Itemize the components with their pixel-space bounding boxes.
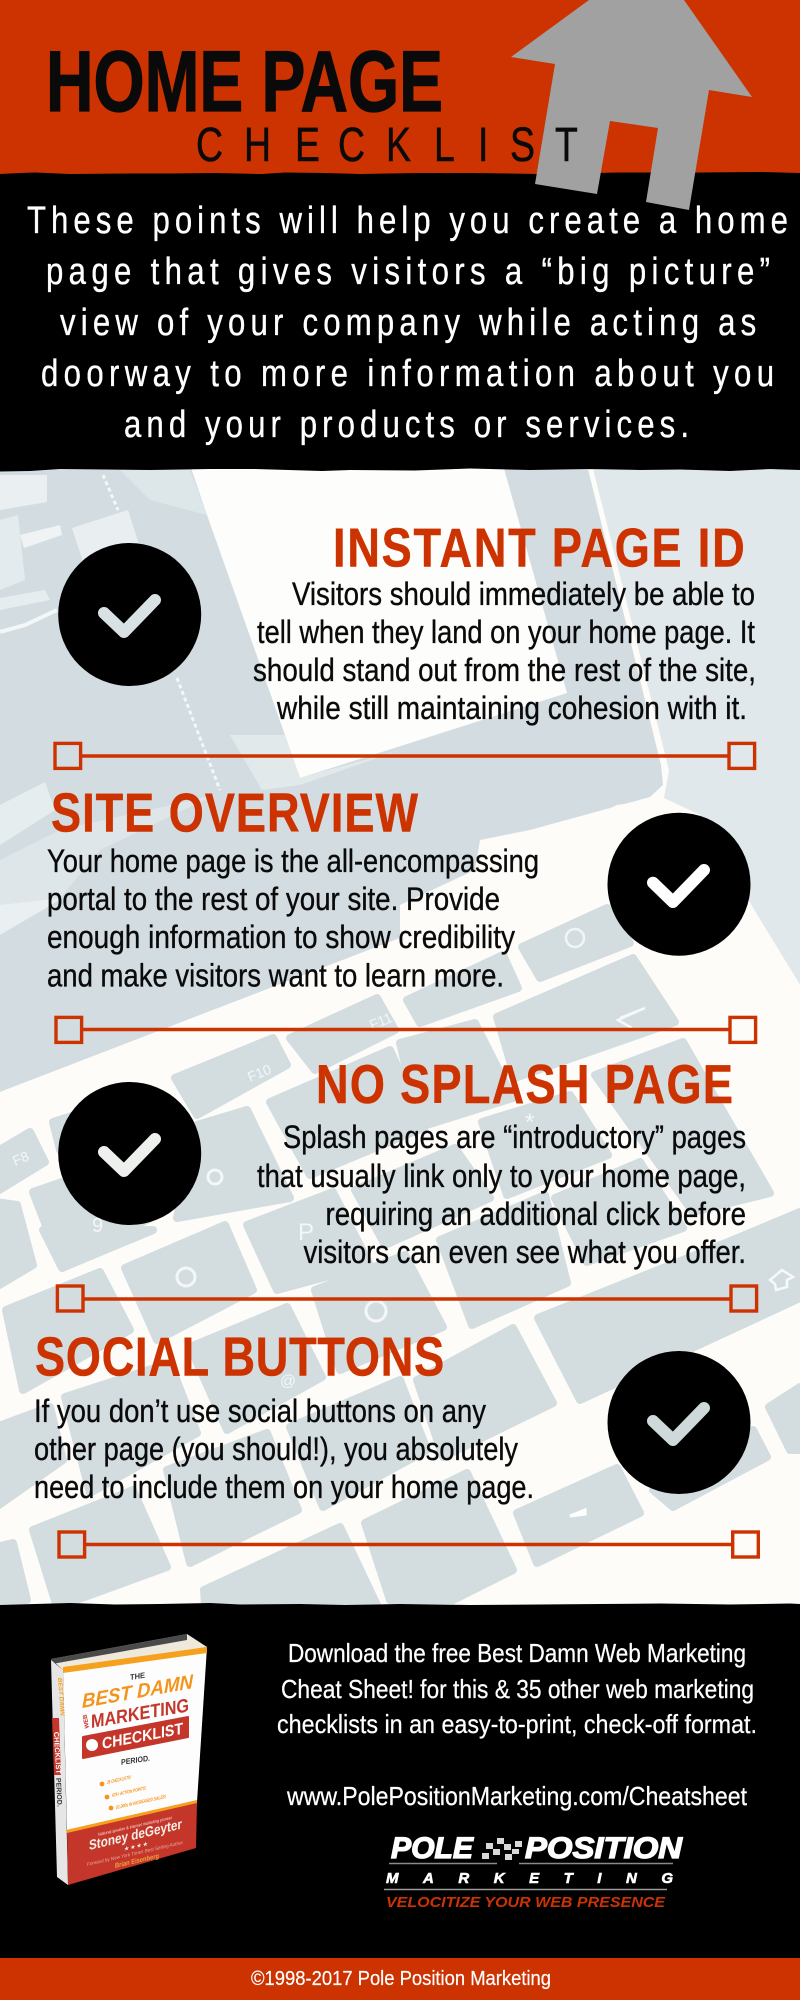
background: keyboard photo: F10 [245, 1061, 274, 1085]
book: spine [51, 1660, 68, 1885]
divider 1 [55, 743, 755, 768]
book: author: Stoney deGeyter [89, 1817, 182, 1854]
item 2: body text [47, 843, 539, 994]
background: keyboard photo: F8 [10, 1148, 31, 1169]
footer text: checklists in an easy-to-print, check-off format. [277, 1709, 757, 1739]
book: orange band [63, 1647, 207, 1673]
intro text: view of your company while acting as [60, 302, 756, 344]
intro text: These points will help you create a home [27, 200, 788, 242]
book: spine text: CHECKLIST [52, 1732, 61, 1775]
book: the: THE [130, 1671, 146, 1682]
logo: pole position marketing [384, 1832, 683, 1911]
logo: pole position marketing: MARKETING [386, 1870, 673, 1887]
item 3: heading: NO SPLASH PAGE [316, 1053, 733, 1115]
background: keyboard photo: 9 [92, 1215, 103, 1237]
title: checklist: CHECKLIST [196, 119, 578, 172]
book: spine text: PERIOD. [54, 1778, 63, 1807]
logo: pole position marketing: VELOCITIZE YOUR WEB PRESENCE [386, 1894, 666, 1911]
item 4: heading: SOCIAL BUTTONS [35, 1325, 444, 1388]
item 1: check icon [58, 543, 201, 686]
book: bullet list: $1,000s IN INCREASED SALES! [115, 1794, 166, 1811]
header band [0, 0, 800, 178]
logo: checkered flag [482, 1838, 522, 1860]
book: spine text: BEST DAMN [56, 1678, 65, 1717]
copyright: ©1998-2017 Pole Position Marketing [251, 1968, 551, 1990]
item 1: heading: INSTANT PAGE ID [333, 516, 745, 579]
background: keyboard photo: P [298, 1219, 314, 1246]
item 3: body text: requiring an additional click before [326, 1196, 746, 1232]
logo: pole position marketing: POLE [391, 1832, 474, 1865]
item 4: check icon [608, 1351, 750, 1494]
item 3: check icon [58, 1082, 201, 1225]
book: red lower band [67, 1802, 197, 1885]
item 4: body text [34, 1393, 534, 1505]
book: bullet list: 35 CHECKLISTS! [107, 1775, 131, 1786]
logo: pole position marketing: POSITION [525, 1832, 683, 1865]
item 3: body text [257, 1119, 746, 1270]
black footer band [0, 1603, 800, 1960]
book: top pages [51, 1634, 207, 1670]
item 2: check icon [608, 813, 750, 956]
book cover [51, 1634, 207, 1885]
item 2: body text: and make visitors want to learn more. [47, 958, 504, 994]
book: tagline: National speaker & internet marketing pioneer [98, 1815, 172, 1837]
intro text: doorway to more information about you [41, 353, 774, 395]
book: checklist text: CHECKLIST [102, 1720, 183, 1753]
item 2: body text: Your home page is the all-encompassing [47, 843, 539, 879]
divider 3 [57, 1286, 757, 1311]
book: checklist badge icon [86, 1739, 98, 1751]
item 2: body text: enough information to show credibility [47, 919, 515, 955]
item 4: body text: need to include them on your home page. [34, 1469, 534, 1505]
background: keyboard photo: @ [280, 1373, 296, 1390]
book: spine text [52, 1678, 65, 1807]
book: bullet list: 675+ ACTION POINTS! [112, 1786, 146, 1799]
book: white front [63, 1647, 207, 1832]
book: marketing: MARKETING [91, 1695, 189, 1733]
book: foreword: Forward by New York Times Best Selling Author [87, 1840, 183, 1868]
footer url: www.PolePositionMarketing.com/Cheatsheet [286, 1781, 748, 1811]
background: keyboard photo: F11 [367, 1009, 395, 1033]
book: best damn: BEST DAMN [82, 1671, 193, 1713]
book: bullet list [100, 1775, 166, 1811]
intro text [27, 200, 788, 446]
item 2: body text: portal to the rest of your site. Provide [47, 881, 500, 917]
item 4: body text: other page (you should!), you absolutely [34, 1431, 518, 1467]
background: keyboard photo: * [525, 1109, 534, 1136]
footer text [277, 1638, 757, 1739]
footer orange band [0, 1958, 800, 2000]
intro text: and your products or services. [124, 404, 689, 446]
divider 4 [59, 1532, 758, 1557]
divider 2 [56, 1017, 756, 1042]
black intro band [0, 172, 800, 472]
background: keyboard photo [0, 465, 800, 1610]
item 4: body text: If you don’t use social buttons on any [34, 1393, 486, 1429]
background: keyboard photo: Make Exportable [306, 711, 403, 759]
item 2: heading: SITE OVERVIEW [51, 781, 419, 844]
book: checklist badge [83, 1717, 188, 1758]
title: home page: HOME PAGE [46, 34, 443, 130]
item 1: body text [253, 576, 756, 726]
book: web: WEB [83, 1713, 91, 1729]
intro text: page that gives visitors a “big picture” [46, 251, 770, 293]
item 1: body text: while still maintaining cohesion with it. [276, 690, 747, 726]
book: brian eisenberg: Brian Eisenberg [115, 1852, 159, 1870]
book: orange stripe [66, 1800, 197, 1833]
book: period: PERIOD. [121, 1754, 150, 1767]
book: stars: ★★★★ [124, 1841, 148, 1853]
icon: grey house [511, 0, 752, 210]
